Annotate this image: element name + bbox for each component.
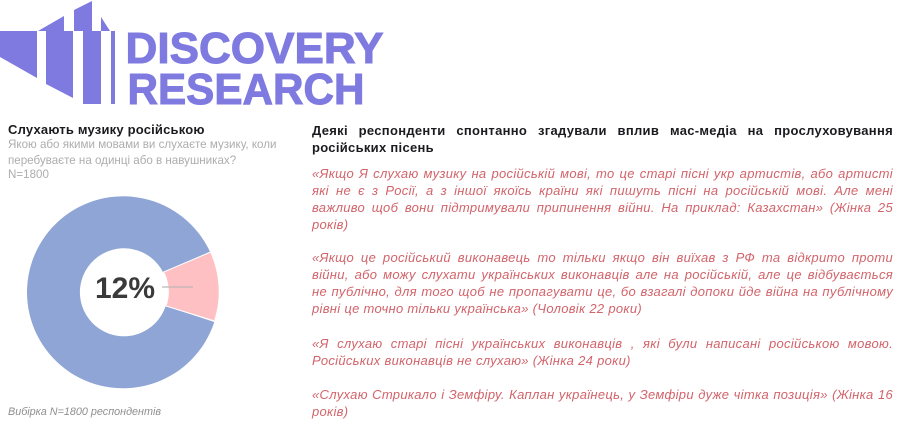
quote 2: «Якщо це російський виконавець то тільки якщо він виїхав з РФ та відкрито проти (312, 250, 893, 265)
quote 1: які не є з Росії, а з іншої якоїсь країни які пишуть пісні на російській мові. Але мені (312, 183, 893, 198)
percentage label: 12% (95, 272, 155, 305)
survey question text: перебуваєте на одинці або в навушниках? (8, 154, 236, 167)
leader line (162, 286, 193, 288)
donut segment: Russian 12% (164, 252, 219, 321)
quote 2 (312, 250, 894, 316)
quote 4: років) (312, 404, 348, 419)
quote 3: «Я слухаю старі пісні українських виконавців , які були написані російською мовою. (312, 336, 893, 351)
survey question text: N=1800 (8, 168, 49, 181)
quote 2: рівні це точно тільки українська» (Чоловік 22 роки) (312, 301, 642, 316)
survey question text (8, 138, 276, 181)
logo: Discovery Research (0, 1, 384, 110)
quote 3: Російських виконавців не слухаю» (Жінка 24 роки) (312, 353, 631, 368)
survey question text: Якою або якими мовами ви слухаєте музику, коли (8, 138, 276, 151)
left panel heading: Слухають музику російською (8, 122, 205, 137)
quote 2: війни, або можу слухати українських виконавців але на російській, але це відбувається (312, 267, 893, 282)
right panel heading (312, 123, 893, 155)
quote 1 (312, 166, 893, 232)
quote 2: не публічно, для того щоб не пропагувати це, бо взагалі допоки йде війна на публічному (312, 284, 893, 299)
right panel heading: Деякі респонденти спонтанно згадували вплив мас-медіа на прослуховування (312, 123, 893, 138)
quote 4 (312, 387, 893, 419)
donut segment: other (27, 196, 214, 388)
right panel heading: російських пісень (312, 140, 434, 155)
sample note: Вибірка N=1800 респондентів (8, 406, 161, 418)
quote 4: «Слухаю Стрикало і Земфіру. Каплан українець, у Земфіри дуже чітка позиція» (Жінка 16 (312, 387, 893, 402)
logo: Discovery Research: DISCOVERY (126, 25, 384, 73)
quote 1: важливо щоб вони підтримували припинення війни. На приклад: Казахстан» (Жінка 25 (312, 200, 893, 215)
quote 3 (312, 336, 893, 368)
donut chart: 12% (27, 196, 219, 388)
quote 1: «Якщо Я слухаю музику на російській мові, то це старі пісні укр артистів, або артисті (312, 166, 893, 181)
quote 1: років) (312, 217, 348, 232)
